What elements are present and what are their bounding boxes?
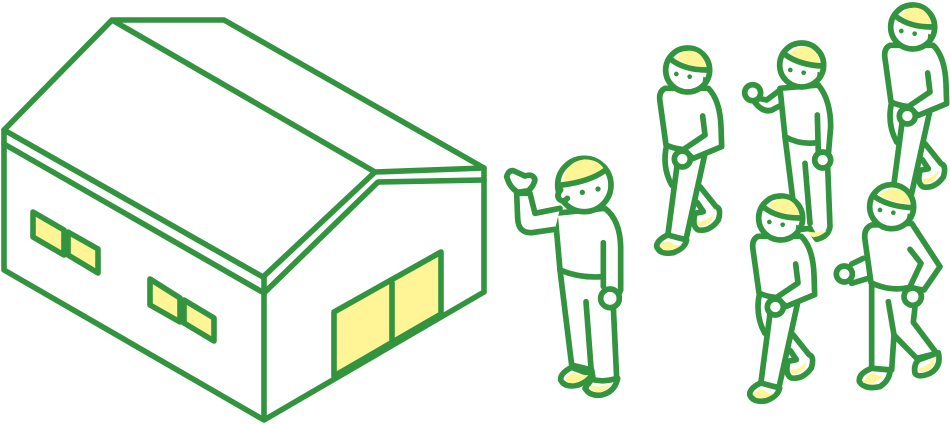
person: bottom right walking with hand on hip bbox=[836, 185, 940, 388]
warehouse building bbox=[4, 20, 484, 420]
walls bbox=[4, 130, 484, 420]
roof bbox=[4, 20, 484, 277]
person: guide waving bbox=[507, 158, 621, 395]
person: bottom centre walking bbox=[750, 196, 815, 401]
person: top right walking bbox=[885, 5, 947, 196]
eaves bbox=[4, 144, 484, 293]
person: top middle walking bbox=[657, 48, 722, 253]
garage door bbox=[334, 252, 441, 376]
window right pair bbox=[150, 279, 214, 341]
window left pair bbox=[33, 212, 98, 273]
person: top centre with raised hand bbox=[745, 43, 831, 239]
